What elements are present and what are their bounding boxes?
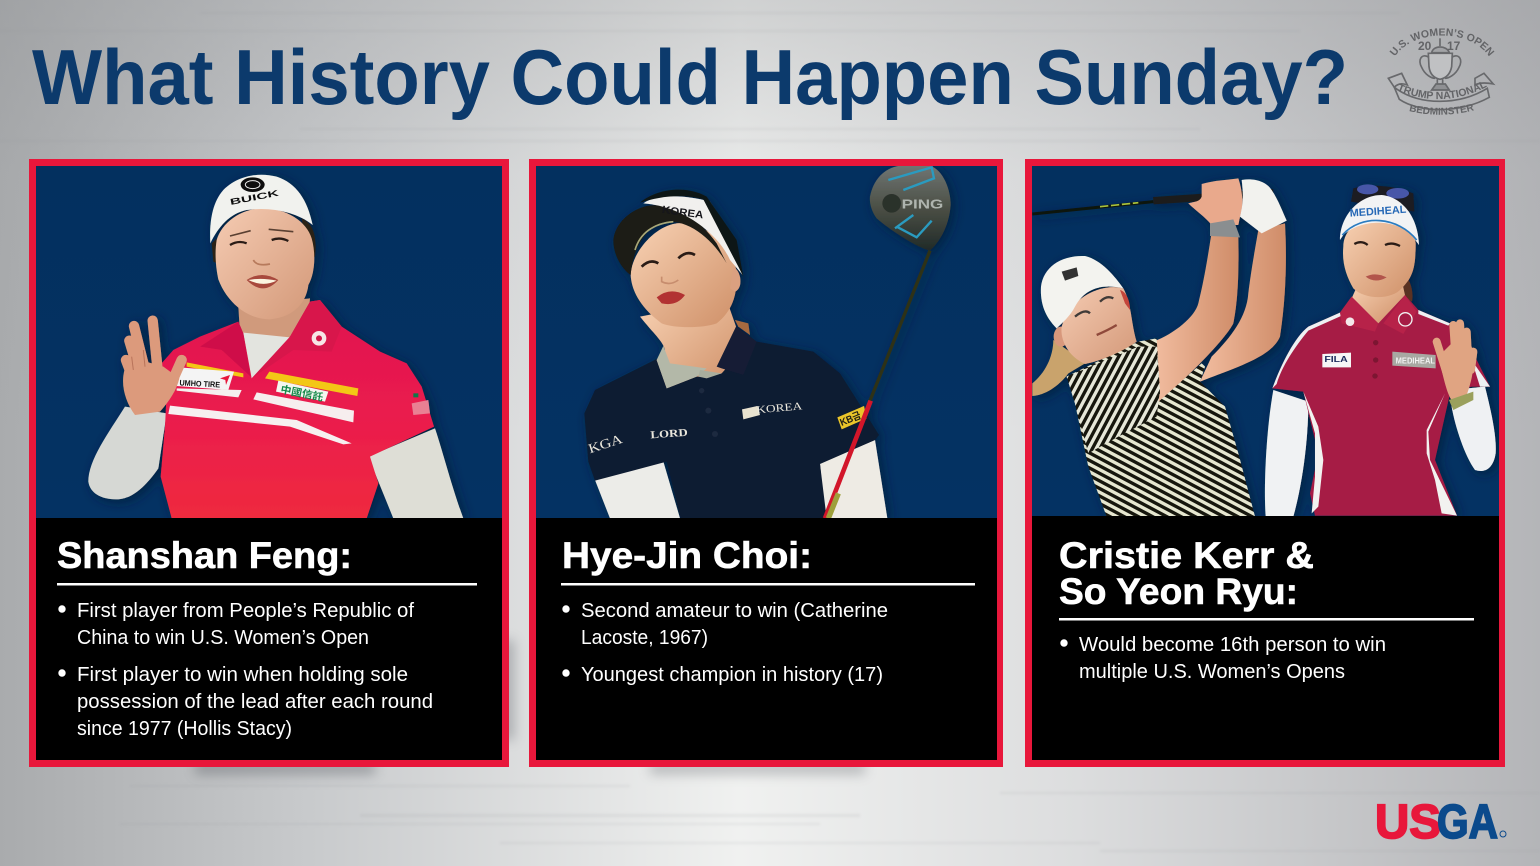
photo: Hye-Jin Choi with driver: LORD	[650, 428, 688, 441]
heading: Cristie Kerr and So Yeon Ryu: Cristie Kerr &	[1059, 535, 1314, 576]
photo: Hye-Jin Choi with driver: KB금	[838, 410, 863, 429]
bullets: Hye-Jin Choi	[562, 600, 888, 686]
photo: Hye-Jin Choi with driver: KOREA	[756, 401, 803, 416]
logo: U.S. Women's Open 2017 Trump National Bedminster: 17	[1447, 39, 1461, 53]
panel: Cristie Kerr and So Yeon Ryu	[1025, 159, 1505, 767]
photo: Shanshan Feng waving	[88, 175, 463, 518]
logo: USGA: US	[1375, 796, 1441, 849]
panel: Shanshan Feng	[29, 159, 509, 767]
bullets: Hye-Jin Choi: Lacoste, 1967)	[581, 627, 708, 649]
bullets: Shanshan Feng	[58, 600, 433, 740]
photo: Shanshan Feng waving: UMHO TIRE	[179, 378, 221, 389]
photo: So Yeon Ryu: MEDIHEAL	[1349, 204, 1407, 220]
bullets: Hye-Jin Choi: Second amateur to win (Catherine	[581, 600, 888, 622]
photo: Hye-Jin Choi with driver	[584, 166, 951, 518]
title: What History Could Happen Sunday?	[32, 33, 1348, 121]
photo: Hye-Jin Choi with driver: KGA	[586, 431, 625, 456]
bullets: Cristie Kerr and So Yeon Ryu: multiple U.S. Women’s Opens	[1079, 661, 1345, 683]
heading: Cristie Kerr and So Yeon Ryu	[1059, 535, 1314, 612]
bullets: Cristie Kerr and So Yeon Ryu	[1060, 634, 1386, 683]
bullets: Shanshan Feng: since 1977 (Hollis Stacy)	[77, 718, 292, 740]
bullets: Shanshan Feng: First player from People’s Republic of	[77, 600, 414, 622]
photo: Hye-Jin Choi with driver: KOREA	[661, 205, 705, 222]
heading: Cristie Kerr and So Yeon Ryu: So Yeon Ryu:	[1059, 571, 1298, 612]
logo: USGA: GA	[1437, 796, 1498, 849]
photo: Shanshan Feng waving: BUICK	[229, 187, 281, 207]
photo: So Yeon Ryu	[1265, 184, 1496, 517]
heading: Shanshan Feng: Shanshan Feng:	[57, 535, 352, 576]
photo: Hye-Jin Choi with driver: PING	[902, 197, 944, 211]
photo: So Yeon Ryu: FILA	[1324, 354, 1348, 364]
photo: Shanshan Feng waving: 中國信託	[279, 383, 324, 404]
bullets: Shanshan Feng: possession of the lead after each round	[77, 691, 433, 713]
bullets: Cristie Kerr and So Yeon Ryu: Would become 16th person to win	[1079, 634, 1386, 656]
logo: U.S. Women's Open 2017 Trump National Bedminster: 20	[1418, 39, 1432, 53]
logo: U.S. Women's Open 2017 Trump National Bedminster: BEDMINSTER	[1410, 104, 1474, 115]
logo: USGA	[1375, 796, 1506, 849]
photo: So Yeon Ryu: MEDIHEAL	[1396, 355, 1436, 365]
logo: U.S. Women's Open 2017 Trump National Bedminster	[1387, 28, 1496, 115]
panel: Hye-Jin Choi	[529, 159, 1003, 767]
bullets: Shanshan Feng: First player to win when holding sole	[77, 664, 408, 686]
logo: U.S. Women's Open 2017 Trump National Bedminster: TRUMP NATIONAL	[1400, 82, 1487, 100]
bullets: Shanshan Feng: China to win U.S. Women’s Open	[77, 627, 369, 649]
photo: Cristie Kerr swinging	[1032, 178, 1496, 517]
logo: U.S. Women's Open 2017 Trump National Bedminster: U.S. WOMEN’S OPEN	[1390, 28, 1494, 56]
bullets: Hye-Jin Choi: Youngest champion in history (17)	[581, 664, 883, 686]
heading: Hye-Jin Choi: Hye-Jin Choi:	[562, 535, 812, 576]
